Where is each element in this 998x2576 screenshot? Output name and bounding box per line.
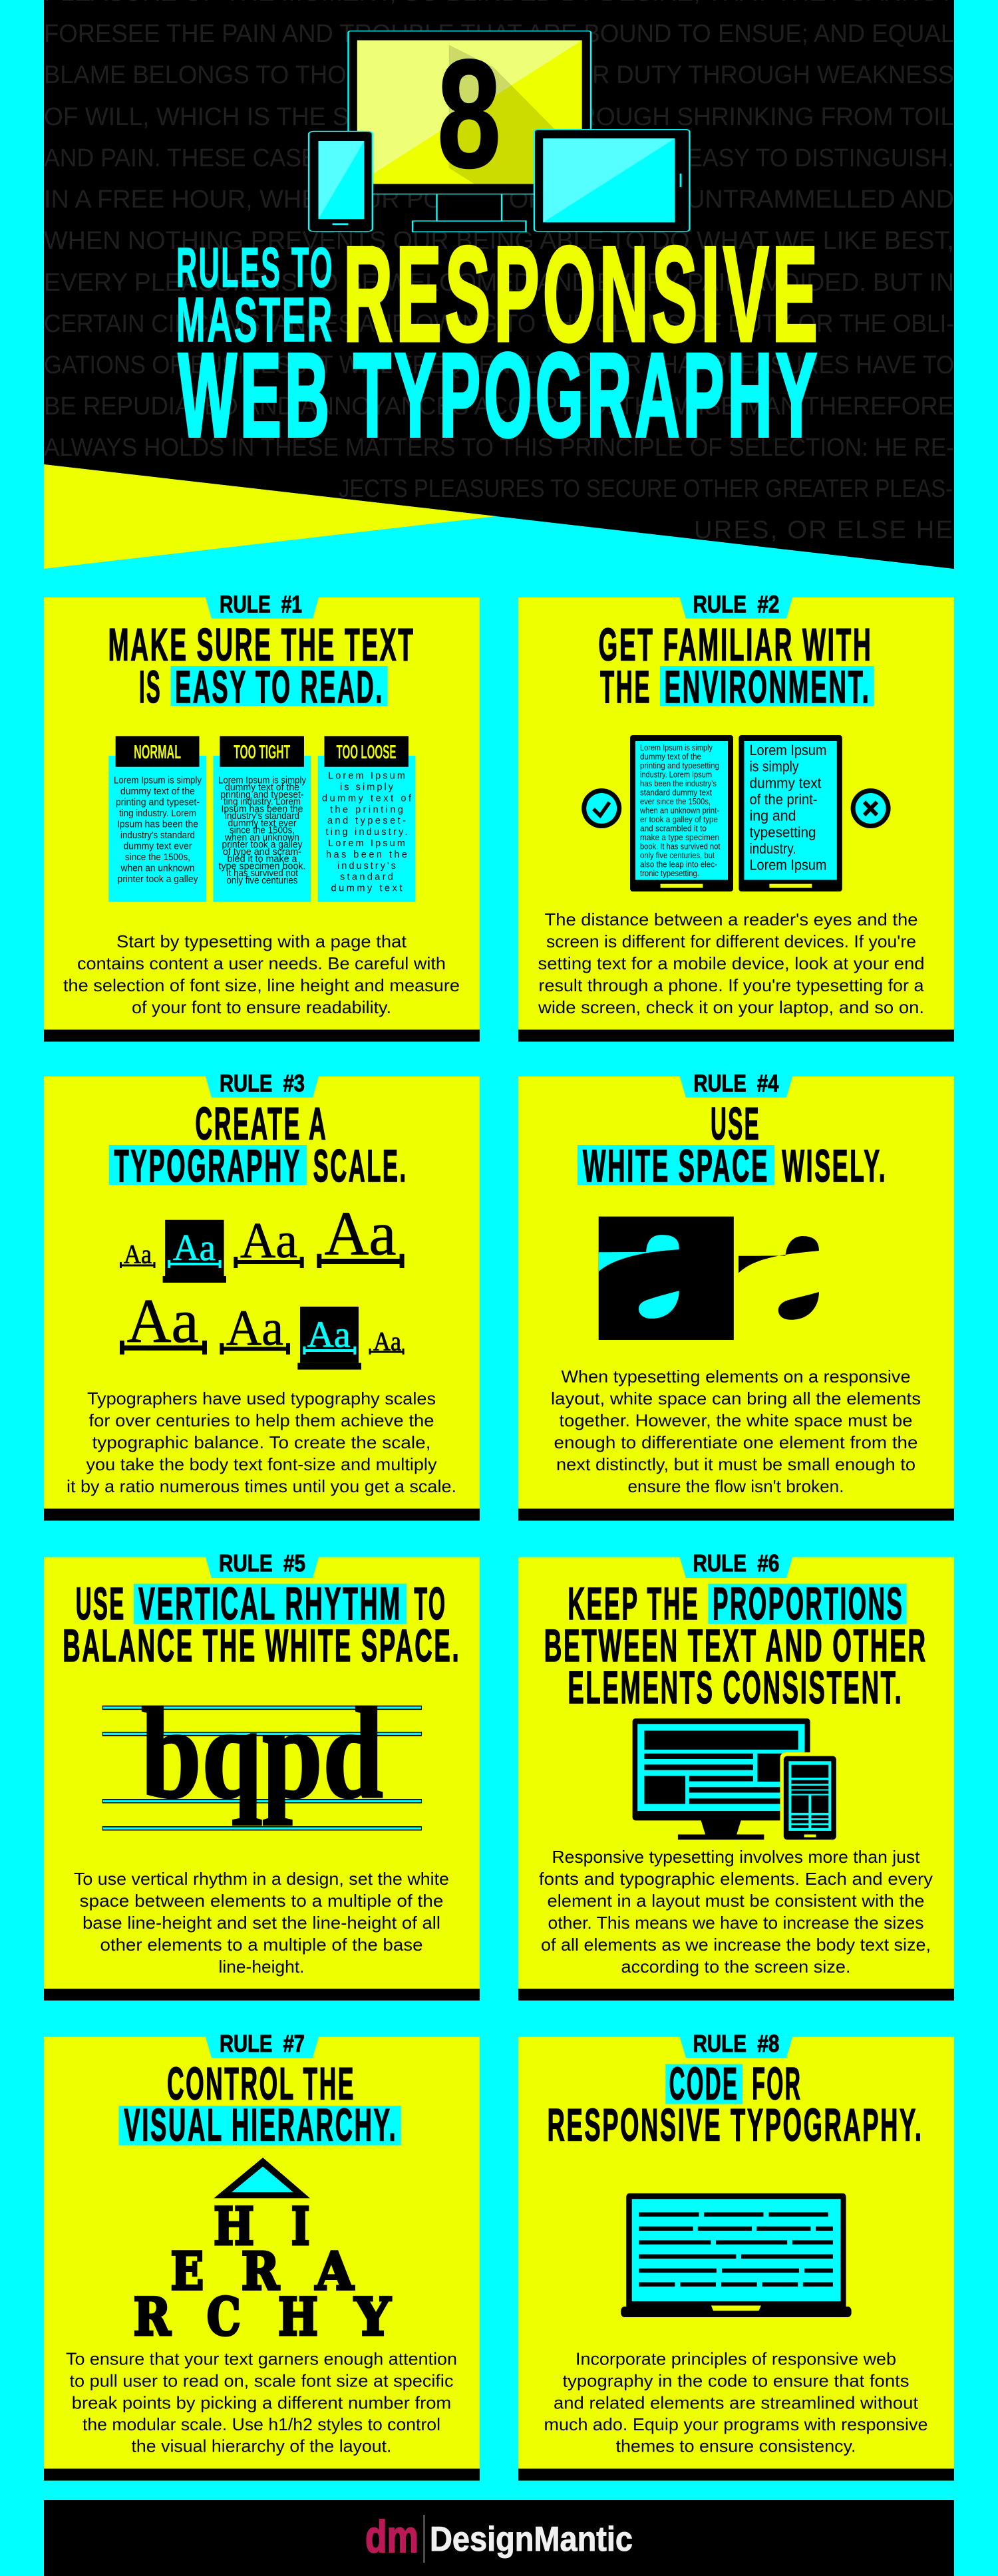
- panel: rule 7: [44, 2030, 480, 2481]
- illustration: hierarchy letters: H: [278, 2287, 318, 2348]
- body text: the selection of font size, line height and measure: [63, 975, 460, 995]
- rule tab: RULE #5: [219, 1549, 305, 1577]
- body text: [544, 2349, 927, 2456]
- illustration: hierarchy letters: R: [133, 2287, 172, 2348]
- background lorem text: URES, OR ELSE HE: [694, 516, 953, 544]
- device: small text: [630, 735, 733, 891]
- heading: CONTROL THE: [167, 2058, 355, 2109]
- body text: the modular scale. Use h1/h2 styles to control: [83, 2414, 440, 2434]
- typography scale specimens: [120, 1200, 405, 1370]
- panel: rule 4: [518, 1069, 954, 1521]
- icon: check mark: [582, 788, 621, 828]
- heading: [109, 1098, 408, 1192]
- body text: themes to ensure consistency.: [616, 2436, 856, 2456]
- text sample: too loose: the printing: [330, 804, 403, 815]
- body text: to pull user to read on, scale font size at specific: [69, 2371, 454, 2391]
- body text: space between elements to a multiple of the: [80, 1891, 443, 1911]
- rule tab: RULE #7: [220, 2030, 305, 2057]
- body text: much ado. Equip your programs with responsive: [544, 2414, 927, 2434]
- panel: rule 8: [518, 2030, 954, 2481]
- specimen 8: Aa: [373, 1326, 401, 1356]
- panel: rule 6: [518, 1549, 954, 2001]
- heading: EASY TO READ.: [175, 661, 384, 713]
- body text: of your font to ensure readability.: [132, 997, 391, 1017]
- body text: fonts and typographic elements. Each and every: [539, 1869, 933, 1889]
- text sample: normal: NORMAL: [134, 742, 181, 763]
- icon: devices with number 8: [309, 28, 689, 232]
- device: small text: er took a galley of type: [640, 815, 718, 824]
- body text: contains content a user needs. Be careful with: [77, 953, 446, 973]
- body text: other. This means we have to increase the sizes: [548, 1913, 923, 1933]
- body text: break points by picking a different number from: [72, 2392, 451, 2412]
- text sample: too tight: when an unknown: [224, 833, 299, 844]
- text sample: too loose: [318, 736, 415, 902]
- heading: THE: [600, 661, 651, 713]
- body text: the visual hierarchy of the layout.: [132, 2436, 391, 2456]
- body text: When typesetting elements on a responsive: [562, 1367, 910, 1386]
- heading: [598, 619, 874, 713]
- device: large text: is simply: [749, 758, 798, 775]
- text sample: too loose: Lorem Ipsum: [328, 771, 405, 782]
- text sample: too tight: dummy text ever: [228, 818, 297, 829]
- heading: CODE: [669, 2058, 739, 2109]
- heading: FOR: [752, 2058, 802, 2109]
- illustration: hierarchy letters: E: [170, 2241, 204, 2302]
- icon: monitor and tablet layouts: [633, 1718, 840, 1844]
- text sample: too tight: ting industry. Lorem: [224, 797, 301, 808]
- heading: KEEP THE: [568, 1578, 699, 1629]
- specimen 4: Aa: [325, 1200, 397, 1269]
- body text: result through a phone. If you're typesetting for a: [539, 975, 924, 995]
- heading: VERTICAL RHYTHM: [138, 1578, 402, 1629]
- number 8: 8: [437, 28, 501, 200]
- rule tab: RULE #8: [693, 2030, 779, 2057]
- heading: CREATE A: [195, 1098, 327, 1150]
- device: small text: make a type specimen: [640, 833, 719, 842]
- body text: element in a layout must be consistent with the: [547, 1891, 925, 1911]
- text sample: too tight: printing and typeset-: [221, 790, 304, 800]
- device: small text: also the leap into elec-: [640, 860, 717, 869]
- body text: [66, 2349, 457, 2456]
- illustration: hierarchy letters: A: [315, 2241, 355, 2302]
- heading: [119, 2058, 401, 2150]
- text sample: too tight: type specimen book.: [218, 861, 306, 872]
- specimen 5: Aa: [127, 1287, 199, 1356]
- specimen 2: Aa: [173, 1227, 216, 1269]
- footer: [44, 2500, 954, 2576]
- body text: ensure the flow isn't broken.: [628, 1476, 844, 1496]
- device: small text: printing and typesetting: [640, 761, 719, 770]
- rule tab: RULE #4: [693, 1069, 778, 1096]
- body text: layout, white space can bring all the elements: [551, 1388, 921, 1408]
- heading: USE: [711, 1098, 760, 1150]
- device: large text: industry.: [749, 840, 796, 857]
- panel: rule 2: [518, 590, 954, 1042]
- heading: TYPOGRAPHY: [114, 1140, 301, 1192]
- icon: cross mark: [851, 788, 891, 828]
- body text: [538, 909, 925, 1017]
- title: RULES TO: [176, 236, 334, 299]
- rule tab: RULE #1: [220, 590, 302, 617]
- body text: [67, 1388, 456, 1496]
- body text: and related elements are streamlined without: [554, 2392, 919, 2412]
- logo: DesignMantic: dm: [365, 2511, 418, 2562]
- body text: enough to differentiate one element from the: [554, 1432, 918, 1452]
- background lorem text: BLAME BELONGS TO THOSE WHO FAIL IN THEIR DUTY THROUGH WEAKNESS: [44, 61, 954, 89]
- heading: [544, 1578, 927, 1713]
- illustration: hierarchy letters: R: [242, 2241, 280, 2302]
- icon: tablet: [534, 130, 689, 232]
- device: large text: dummy text: [749, 774, 821, 791]
- logo: DesignMantic: DesignMantic: [430, 2520, 633, 2559]
- text sample: too loose: ting industry.: [326, 827, 407, 838]
- illustration: vertical rhythm lines and letters: bqpd: [141, 1681, 383, 1826]
- panel: rule 5: [44, 1549, 480, 2001]
- text sample: too tight: dummy text of the: [225, 782, 299, 793]
- text sample: normal: dummy text of the: [120, 786, 195, 797]
- body text: according to the screen size.: [621, 1957, 850, 1977]
- body text: wide screen, check it on your laptop, and so on.: [538, 997, 924, 1017]
- device: small text: standard dummy text: [640, 788, 712, 797]
- text sample: normal: since the 1500s,: [125, 852, 190, 863]
- text sample: too tight: bled it to make a: [228, 854, 297, 865]
- logo: DesignMantic: [365, 2511, 633, 2563]
- body text: typography in the code to ensure that fonts: [563, 2371, 909, 2391]
- heading: WHITE SPACE: [583, 1140, 769, 1192]
- icon: letter a counter forms: [599, 1217, 819, 1340]
- text sample: too loose: is simply: [340, 782, 394, 793]
- specimen 7: [297, 1307, 361, 1370]
- body text: other elements to a multiple of the base: [100, 1935, 423, 1955]
- body text: next distinctly, but it must be small enough to: [556, 1454, 915, 1474]
- heading: SCALE.: [313, 1140, 408, 1192]
- device: large text: [739, 735, 842, 891]
- title: [176, 219, 821, 462]
- body text: line-height.: [218, 1957, 305, 1977]
- heading: [108, 619, 415, 713]
- header banner: [44, 0, 954, 569]
- heading: [63, 1578, 460, 1671]
- heading: VISUAL HIERARCHY.: [124, 2100, 397, 2150]
- device: small text: and scrambled it to: [640, 824, 707, 833]
- specimen 6: Aa: [226, 1300, 283, 1356]
- text sample: too tight: of type and scram-: [223, 847, 301, 858]
- specimen 2: [163, 1220, 226, 1283]
- rule tab: RULE #6: [693, 1549, 779, 1577]
- heading: BALANCE THE WHITE SPACE.: [63, 1620, 460, 1671]
- device: small text: dummy text of the: [640, 752, 701, 761]
- icon: desktop monitor: [348, 31, 591, 232]
- body text: The distance between a reader's eyes and the: [544, 909, 918, 929]
- text sample: too tight: TOO TIGHT: [234, 742, 290, 763]
- body text: typographic balance. To create the scale,: [92, 1432, 431, 1452]
- background lorem text: BE REPUDIATED AND ANNOYANCES ACCEPTED. THE WISE MAN THEREFORE: [44, 393, 954, 420]
- heading: WISELY.: [782, 1140, 887, 1192]
- body text: it by a ratio numerous times until you get a scale.: [67, 1476, 456, 1496]
- text sample: too tight: [213, 736, 311, 902]
- heading: [578, 1098, 887, 1192]
- body text: To use vertical rhythm in a design, set the white: [74, 1869, 449, 1889]
- text sample: too loose: standard: [340, 872, 393, 883]
- illustration: hierarchy letters: H: [214, 2196, 254, 2257]
- illustration: hierarchy letters: Y: [354, 2287, 391, 2348]
- text sample: too tight: since the 1500s,: [230, 826, 295, 836]
- icon: hierarchy pyramid top: [214, 2158, 310, 2198]
- background lorem text: OF WILL, WHICH IS THE SAME AS SAYING THROUGH SHRINKING FROM TOIL: [44, 103, 954, 131]
- rule tab: RULE #3: [220, 1069, 305, 1096]
- body text: Start by typesetting with a page that: [116, 931, 407, 951]
- text sample: too loose: Lorem Ipsum: [328, 838, 405, 849]
- device: small text: ever since the 1500s,: [640, 797, 711, 806]
- background lorem text: AND PAIN. THESE CASES ARE PERFECTLY SIMPLE AND EASY TO DISTINGUISH.: [44, 144, 954, 172]
- body text: together. However, the white space must be: [559, 1410, 913, 1430]
- text sample: normal: when an unknown: [120, 864, 194, 874]
- device: small text: only five centuries, but: [640, 851, 715, 860]
- device: small text: when an unknown print-: [639, 806, 719, 816]
- heading: USE: [76, 1578, 126, 1629]
- device: small text: book. It has survived not: [640, 842, 721, 852]
- icon: phone: [309, 131, 373, 232]
- illustration: hierarchy letters: C: [207, 2287, 241, 2348]
- text sample: too loose: has been the: [326, 850, 407, 860]
- text sample: normal: printer took a galley: [117, 874, 198, 885]
- specimen 7: Aa: [307, 1315, 351, 1356]
- device: large text: Lorem Ipsum: [749, 742, 826, 758]
- text sample: too loose: and typeset-: [327, 816, 406, 826]
- rule tab: RULE #2: [693, 590, 779, 617]
- device: small text: Lorem Ipsum is simply: [640, 743, 713, 752]
- device: large text: of the print-: [749, 791, 817, 808]
- body text: To ensure that your text garners enough attention: [66, 2349, 457, 2369]
- background lorem text: ALWAYS HOLDS IN THESE MATTERS TO THIS PRINCIPLE OF SELECTION: HE RE-: [44, 434, 954, 462]
- body text: [63, 931, 460, 1017]
- device: large text: ing and: [749, 808, 796, 824]
- heading: IS: [139, 661, 162, 713]
- background lorem text: FORESEE THE PAIN AND TROUBLE THAT ARE BOUND TO ENSUE; AND EQUAL: [44, 20, 954, 48]
- heading: MAKE SURE THE TEXT: [108, 619, 415, 671]
- text sample: too tight: industry's standard: [225, 811, 299, 822]
- text sample: too tight: It has survived not: [226, 868, 298, 879]
- background lorem text: IN A FREE HOUR, WHEN OUR POWER OF CHOICE IS UNTRAMMELLED AND: [44, 186, 954, 214]
- specimen 1: Aa: [124, 1239, 152, 1269]
- body text: setting text for a mobile device, look at your end: [538, 953, 925, 973]
- text sample: too loose: dummy text: [331, 884, 402, 894]
- illustration: hierarchy letters: I: [291, 2196, 310, 2257]
- device: large text: Lorem Ipsum: [749, 857, 826, 874]
- heading: [548, 2058, 923, 2150]
- body text: you take the body text font-size and multiply: [86, 1454, 436, 1474]
- text sample: too tight: Lorem Ipsum is simply: [218, 776, 307, 786]
- text sample: normal: printing and typeset-: [116, 797, 200, 808]
- title: MASTER: [176, 285, 334, 355]
- body text: screen is different for different devices. If you're: [546, 931, 916, 951]
- text sample: too loose: industry's: [337, 861, 396, 872]
- text sample: too tight: printer took a galley: [222, 840, 303, 850]
- body text: [539, 1847, 933, 1977]
- device: large text: typesetting: [749, 824, 816, 840]
- body text: Incorporate principles of responsive web: [576, 2349, 896, 2369]
- body text: [551, 1367, 921, 1496]
- body text: Responsive typesetting involves more than just: [552, 1847, 920, 1867]
- body text: base line-height and set the line-height of all: [83, 1913, 440, 1933]
- device: small text: tronic typesetting.: [640, 869, 699, 878]
- specimen 3: Aa: [240, 1213, 297, 1269]
- device: small text: has been the industry's: [640, 779, 717, 788]
- text sample: normal: [108, 736, 206, 902]
- body text: Typographers have used typography scales: [87, 1388, 436, 1408]
- text sample: too tight: Ipsum has been the: [221, 804, 303, 814]
- icon: laptop with text lines: [621, 2193, 852, 2317]
- background lorem text: [44, 0, 954, 544]
- text sample: too loose: dummy text of: [322, 793, 412, 804]
- panel: rule 1: [44, 590, 480, 1042]
- text sample: normal: dummy text ever: [124, 841, 192, 852]
- text sample: normal: Lorem Ipsum is simply: [114, 776, 202, 786]
- panel: rule 3: [44, 1069, 480, 1521]
- heading: TO: [414, 1578, 446, 1629]
- body text: of all elements as we increase the body text size,: [541, 1935, 931, 1955]
- background lorem text: CERTAIN CIRCUMSTANCES AND OWING TO THE CLAIMS OF DUTY OR THE OBLI-: [44, 310, 954, 338]
- illustration: hierarchy letters: [133, 2196, 391, 2348]
- text sample: normal: ting industry. Lorem: [119, 808, 196, 819]
- text sample: normal: industry's standard: [120, 830, 195, 841]
- body text: for over centuries to help them achieve the: [89, 1410, 434, 1430]
- text sample: too tight: only five centuries: [226, 876, 298, 886]
- device: small text: industry. Lorem Ipsum: [640, 770, 712, 780]
- body text: [74, 1869, 449, 1977]
- text sample: too loose: TOO LOOSE: [337, 742, 397, 763]
- background lorem text: EVERY PLEASURE IS TO BE WELCOMED AND EVERY PAIN AVOIDED. BUT IN: [44, 269, 954, 297]
- background lorem text: WHEN NOTHING PREVENTS OUR BEING ABLE TO DO WHAT WE LIKE BEST,: [44, 227, 954, 255]
- text sample: normal: Ipsum has been the: [117, 820, 198, 830]
